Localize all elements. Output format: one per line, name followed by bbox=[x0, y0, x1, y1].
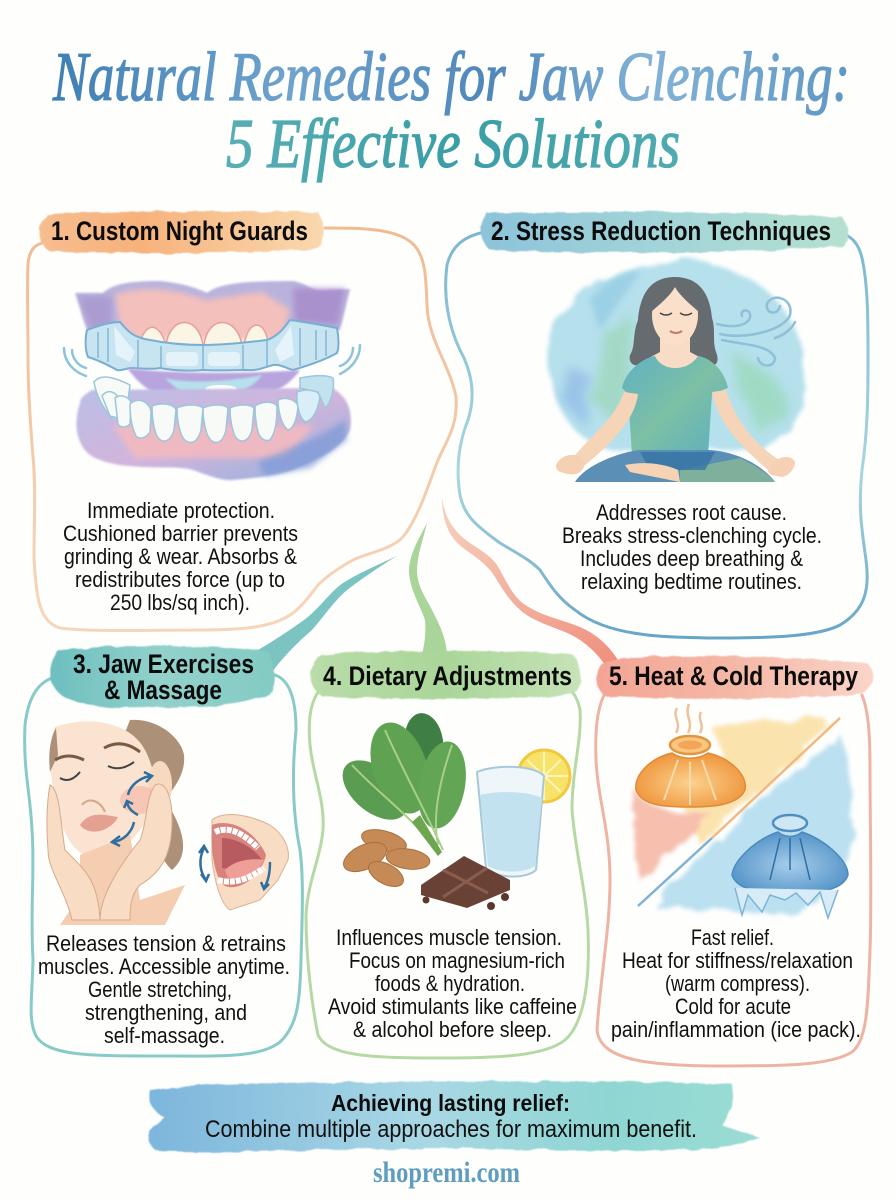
middle palate bbox=[127, 368, 300, 404]
banner: achieving lasting relief bbox=[149, 1081, 760, 1152]
panel 1 text: Cushioned barrier prevents bbox=[63, 521, 298, 546]
panel 5 text: Heat for stiffness/relaxation bbox=[622, 948, 853, 973]
panel 4 text: Focus on magnesium-rich bbox=[349, 948, 565, 973]
icon: chocolate bbox=[421, 856, 510, 910]
panel 5 heading bbox=[597, 656, 873, 699]
panel 5 text: (warm compress). bbox=[665, 971, 810, 996]
panel 5: heat and cold therapy bbox=[596, 656, 873, 1066]
panel 3 text: muscles. Accessible anytime. bbox=[38, 954, 290, 979]
banner: achieving lasting relief: Combine multiple approaches for maximum benefit. bbox=[205, 1116, 697, 1143]
upper gum bbox=[75, 281, 350, 332]
panel 5 text: Fast relief. bbox=[691, 925, 774, 950]
connector: teal to panel 3 bbox=[258, 556, 397, 672]
panel 5 text: pain/inflammation (ice pack). bbox=[611, 1017, 861, 1042]
panel 3 text: Gentle stretching, bbox=[88, 977, 232, 1002]
panel 3 heading: & Massage bbox=[104, 675, 222, 705]
lower teeth bbox=[94, 376, 333, 443]
panel 1 text: redistributes force (up to bbox=[75, 567, 285, 592]
panel 2 text: Includes deep breathing & bbox=[580, 546, 803, 571]
panel 1 border bbox=[28, 228, 456, 630]
panel 4 text: Avoid stimulants like caffeine bbox=[328, 994, 577, 1019]
icon: almonds bbox=[339, 825, 431, 892]
panel 2 text bbox=[562, 500, 822, 594]
panel 2 border bbox=[446, 232, 868, 638]
panel 1 heading bbox=[40, 211, 324, 253]
icon: warm and cold washes bbox=[632, 714, 853, 916]
icon: ice pack bbox=[732, 815, 848, 918]
panel 1 heading: 1. Custom Night Guards bbox=[51, 216, 308, 246]
panel 4 heading bbox=[312, 651, 581, 699]
panel 2 text: relaxing bedtime routines. bbox=[581, 569, 802, 594]
panel 4: dietary adjustments bbox=[306, 651, 588, 1058]
panel 1: custom night guards bbox=[28, 211, 456, 630]
panel 5 text: Cold for acute bbox=[675, 994, 791, 1019]
panel 4 text: & alcohol before sleep. bbox=[353, 1017, 552, 1042]
panel 4 heading: 4. Dietary Adjustments bbox=[323, 661, 572, 691]
panel 4 text bbox=[328, 925, 577, 1042]
title: 5 Effective Solutions bbox=[226, 106, 680, 183]
panel 1 text: grinding & wear. Absorbs & bbox=[64, 544, 297, 569]
panel 2 heading bbox=[482, 212, 847, 253]
upper guard bbox=[86, 320, 338, 371]
icon: glass of water with lemon bbox=[477, 750, 570, 877]
panel 5 border bbox=[596, 695, 871, 1066]
panel 1 text bbox=[63, 498, 298, 615]
panel 1 text: 250 lbs/sq inch). bbox=[110, 590, 250, 615]
panel 4 border bbox=[306, 692, 588, 1058]
icon: spinach leaves bbox=[332, 711, 472, 856]
panel 3 text: Releases tension & retrains bbox=[46, 931, 286, 956]
banner: achieving lasting relief: Achieving lasting relief: bbox=[331, 1090, 570, 1116]
panel 3 text: self-massage. bbox=[104, 1023, 225, 1048]
panel 3 heading: 3. Jaw Exercises bbox=[73, 649, 254, 679]
panel 3 text bbox=[38, 931, 290, 1048]
panel 2 text: Addresses root cause. bbox=[596, 500, 787, 525]
panel 2: stress reduction techniques bbox=[446, 212, 868, 638]
panel 2 heading: 2. Stress Reduction Techniques bbox=[491, 216, 831, 246]
title bbox=[52, 39, 850, 183]
connector: salmon to panel 5 bbox=[442, 498, 618, 665]
panel 3 text: strengthening, and bbox=[85, 1000, 247, 1025]
lower gum bbox=[76, 388, 351, 480]
footer: website: shopremi.com bbox=[373, 1156, 520, 1189]
panel 2 text: Breaks stress-clenching cycle. bbox=[562, 523, 822, 548]
panel 3 heading bbox=[50, 645, 274, 707]
panel 5 heading: 5. Heat & Cold Therapy bbox=[609, 661, 858, 691]
connector: green to panel 4 bbox=[409, 523, 447, 655]
panel 1 text: Immediate protection. bbox=[87, 498, 275, 523]
icon: face massage bbox=[47, 720, 185, 925]
icon: meditating woman bbox=[548, 260, 805, 482]
panel 3: jaw exercises and massage bbox=[25, 645, 302, 1056]
icon: open mouth with jaw arrows bbox=[199, 815, 288, 910]
panel 4 text: Influences muscle tension. bbox=[336, 925, 562, 950]
icon: hot water bottle bbox=[636, 704, 745, 807]
panel 3 border bbox=[25, 675, 302, 1056]
panel 4 text: foods & hydration. bbox=[375, 971, 525, 996]
panel 5 text bbox=[611, 925, 861, 1042]
icon: night guard and teeth bbox=[64, 281, 360, 480]
